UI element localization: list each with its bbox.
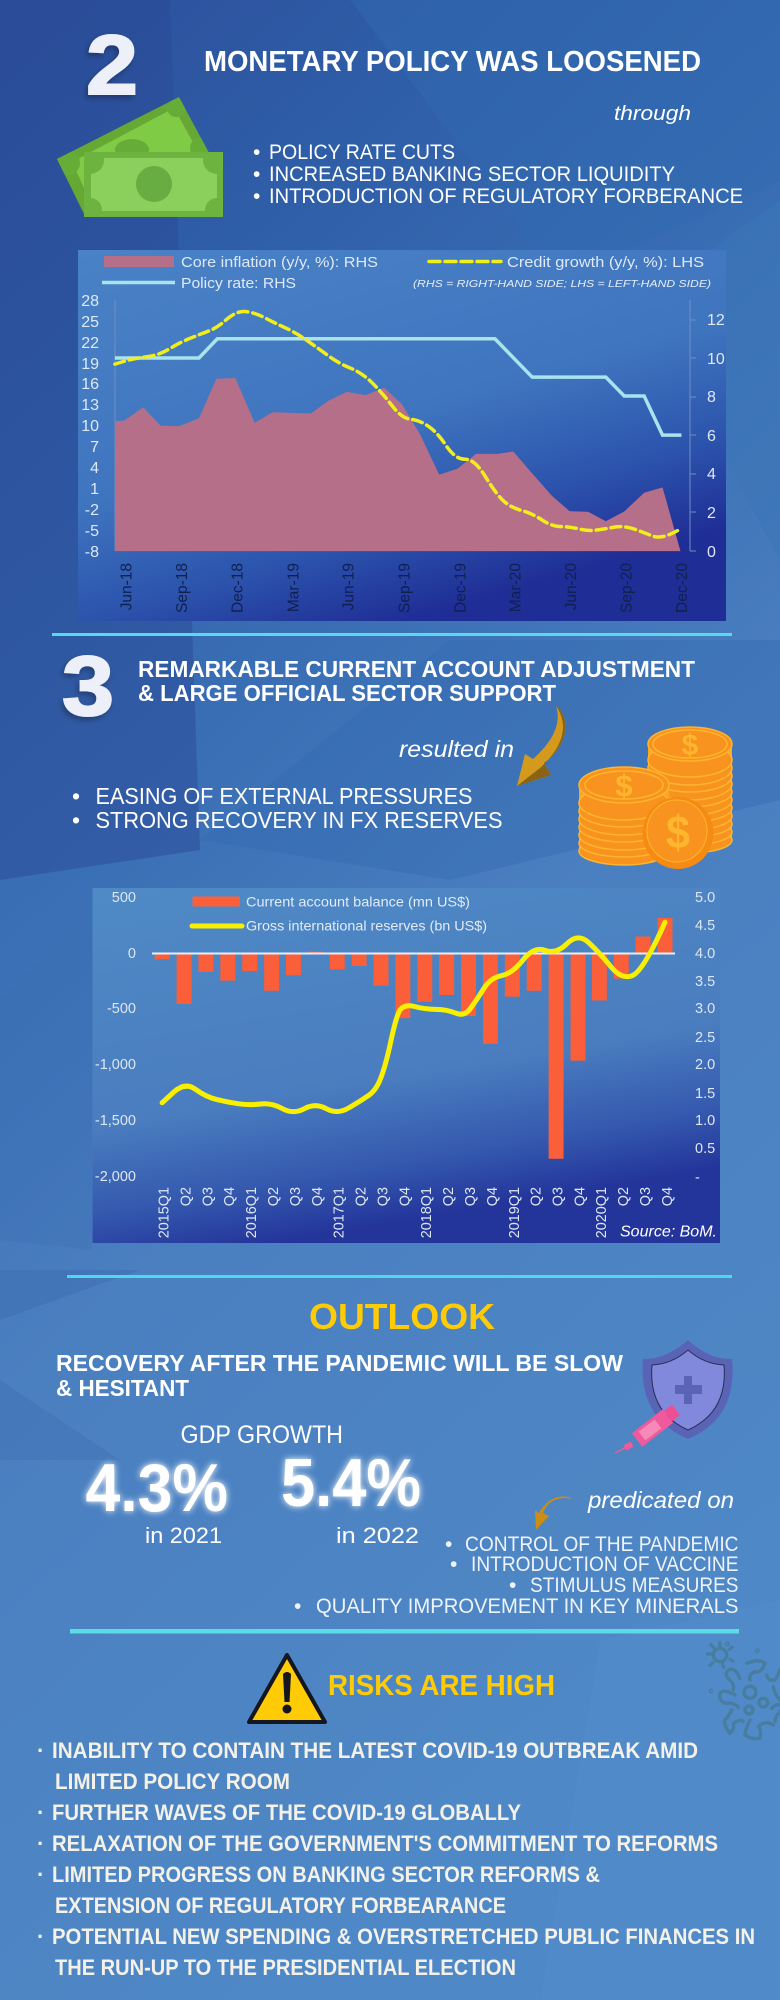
outlook bullet list: INTRODUCTION OF VACCINE — [471, 1553, 738, 1576]
chart 1 legend — [102, 254, 711, 292]
chart 1 right axis: 4 — [707, 466, 716, 483]
chart 2 right axis: 1.0 — [695, 1113, 715, 1129]
chart 1 time axis labels: Dec-20 — [674, 563, 691, 613]
outlook bullet list: • — [450, 1553, 457, 1576]
chart 1 right axis: 2 — [707, 505, 716, 522]
chart 2 quarter labels: Q3 — [463, 1187, 479, 1206]
chart 1 time axis labels — [118, 563, 691, 613]
panel: current account and reserves chart — [92, 888, 720, 1243]
chart 2 quarter labels: Q2 — [528, 1187, 544, 1206]
outlook subheading: & HESITANT — [56, 1375, 190, 1401]
chart 1 left axis: -8 — [85, 544, 99, 561]
chart 1 time axis labels: Jun-20 — [563, 563, 580, 610]
chart 2 quarter labels — [156, 1187, 676, 1238]
divider — [52, 633, 732, 636]
outlook bullet list: CONTROL OF THE PANDEMIC — [465, 1533, 738, 1556]
chart 1 time axis labels: Sep-20 — [618, 563, 636, 613]
chart 1 left axis: 1 — [90, 481, 99, 498]
chart 1 left axis: 22 — [81, 335, 99, 352]
chart 1 right axis: 0 — [707, 544, 716, 561]
chart 2 quarter labels: Q2 — [266, 1187, 282, 1206]
section 2 number: 2 — [86, 18, 138, 112]
current account bars — [155, 918, 672, 1159]
section 3 heading: REMARKABLE CURRENT ACCOUNT ADJUSTMENT — [138, 656, 695, 682]
outlook heading: OUTLOOK — [309, 1296, 495, 1337]
section 3 bullet list: • — [72, 807, 80, 833]
section 2 bullet list: INCREASED BANKING SECTOR LIQUIDITY — [269, 163, 675, 186]
chart 1 time axis labels: Mar-20 — [508, 563, 524, 612]
chart 2 left axis: -1,500 — [95, 1113, 136, 1129]
label: predicated on: predicated on — [587, 1487, 734, 1513]
risks bullet list: · — [37, 1862, 44, 1887]
chart 1 left axis: -5 — [85, 523, 99, 540]
back coin dollar sign: $ — [682, 729, 699, 762]
outlook bullet list: QUALITY IMPROVEMENT IN KEY MINERALS — [316, 1595, 738, 1618]
front coin — [642, 797, 714, 869]
chart 2 quarter labels: Q4 — [660, 1187, 676, 1206]
chart 2 quarter labels: Q4 — [222, 1187, 238, 1206]
icon: shield and syringe — [615, 1340, 733, 1453]
arrow: small gold — [535, 1496, 573, 1530]
risks bullet list: INABILITY TO CONTAIN THE LATEST COVID-19 OUTBREAK AMID — [52, 1738, 698, 1763]
chart 1 time axis labels: Jun-19 — [340, 563, 358, 610]
arrow: curved gold — [517, 706, 565, 786]
left coin stack — [579, 767, 669, 865]
chart 1 left axis — [81, 293, 115, 561]
risks bullet list: LIMITED PROGRESS ON BANKING SECTOR REFORMS & — [52, 1862, 600, 1887]
risks bullet list: RELAXATION OF THE GOVERNMENT'S COMMITMENT TO REFORMS — [52, 1831, 718, 1856]
chart 1 legend: (RHS = RIGHT-HAND SIDE; LHS = LEFT-HAND SIDE) — [413, 278, 711, 290]
chart 2 quarter labels: 2020Q1 — [594, 1187, 610, 1238]
outlook bullet list: • — [294, 1595, 301, 1618]
chart 2 quarter labels: 2019Q1 — [507, 1187, 523, 1238]
chart 2 right axis: 0.5 — [695, 1141, 715, 1157]
section 3 bullet list — [72, 783, 502, 833]
core inflation area — [115, 378, 680, 551]
chart 2 quarter labels: Q4 — [485, 1187, 501, 1206]
chart 2 quarter labels: Q2 — [354, 1187, 370, 1206]
chart 2 quarter labels: 2018Q1 — [419, 1187, 435, 1238]
label: through: through — [614, 103, 691, 125]
chart 2 right axis: 5.0 — [695, 890, 715, 906]
section 2 bullet list: INTRODUCTION OF REGULATORY FORBERANCE — [269, 185, 743, 208]
outlook bullet list: • — [445, 1533, 452, 1556]
risks bullet list: · — [37, 1924, 44, 1949]
section 2 bullet list: • — [253, 163, 260, 186]
chart 2 quarter labels: 2016Q1 — [244, 1187, 260, 1238]
outlook subheading: RECOVERY AFTER THE PANDEMIC WILL BE SLOW — [56, 1350, 624, 1376]
chart 2 left axis: -500 — [107, 1001, 136, 1017]
chart 2 left axis: 0 — [128, 946, 136, 962]
chart 2 right axis — [695, 890, 715, 1186]
section 2 bullet list: • — [253, 141, 260, 164]
chart 1 left axis: 25 — [81, 314, 99, 331]
chart 1 left axis: 13 — [81, 397, 99, 414]
chart 2 right axis: 4.5 — [695, 918, 715, 934]
chart 2 quarter labels: Q3 — [288, 1187, 304, 1206]
chart 2 right axis: - — [695, 1170, 700, 1186]
label: resulted in: resulted in — [399, 736, 514, 762]
divider — [70, 1629, 739, 1634]
chart 2 right axis: 3.5 — [695, 974, 715, 990]
chart 1 right axis: 8 — [707, 389, 716, 406]
chart 1 legend: Credit growth (y/y, %): LHS — [507, 254, 704, 271]
front coin dollar sign: $ — [666, 806, 690, 858]
label: GDP growth: GDP GROWTH — [180, 1421, 343, 1449]
divider — [67, 1275, 732, 1278]
outlook bullet list: • — [509, 1574, 516, 1597]
stat: 2022 growth — [281, 1445, 421, 1548]
chart 2 legend: Gross international reserves (bn US$) — [246, 918, 487, 934]
chart 1 right axis: 10 — [707, 351, 725, 368]
section 3 bullet list: STRONG RECOVERY IN FX RESERVES — [96, 807, 502, 833]
icon: warning triangle — [249, 1655, 325, 1722]
risks bullet list: LIMITED POLICY ROOM — [55, 1769, 290, 1794]
stat: 2022 growth: 5.4% — [281, 1445, 421, 1521]
chart 1 legend: Policy rate: RHS — [181, 275, 296, 292]
risks heading: RISKS ARE HIGH — [328, 1670, 555, 1702]
chart 1 left axis: -2 — [85, 502, 99, 519]
risks bullet list: · — [37, 1738, 44, 1763]
chart 1 time axis labels: Mar-19 — [286, 563, 302, 612]
chart 2 quarter labels: 2015Q1 — [156, 1187, 172, 1238]
chart 1 left axis: 28 — [81, 293, 99, 310]
section 2 bullet list: POLICY RATE CUTS — [269, 141, 455, 164]
chart 2 quarter labels: Q4 — [572, 1187, 588, 1206]
chart 2 right axis: 4.0 — [695, 946, 715, 962]
back coin stack — [648, 727, 732, 853]
chart 2 quarter labels: Q2 — [616, 1187, 632, 1206]
chart 2 quarter labels: Q2 — [441, 1187, 457, 1206]
chart 2 right axis: 1.5 — [695, 1086, 715, 1102]
chart 1 left axis: 7 — [90, 439, 99, 456]
chart 1 right axis: 6 — [707, 428, 716, 445]
chart 1 right axis — [690, 300, 725, 561]
credit growth dashed line — [115, 311, 677, 537]
outlook subheading — [56, 1350, 624, 1401]
chart 1 time axis labels: Dec-19 — [452, 563, 470, 613]
chart 2 left axis: -1,000 — [95, 1057, 136, 1073]
chart 2 left axis: -2,000 — [95, 1169, 136, 1185]
chart 2 legend: Current account balance (mn US$) — [246, 894, 470, 910]
chart 2 quarter labels: Q4 — [310, 1187, 326, 1206]
risks bullet list: · — [37, 1831, 44, 1856]
risks bullet list: EXTENSION OF REGULATORY FORBEARANCE — [55, 1893, 506, 1918]
section 3 bullet list: EASING OF EXTERNAL PRESSURES — [96, 783, 472, 809]
chart 2 right axis: 3.0 — [695, 1001, 715, 1017]
chart 2 quarter labels: Q3 — [376, 1187, 392, 1206]
section 3 heading — [138, 656, 695, 706]
risks bullet list — [37, 1738, 755, 1980]
chart 1 time axis labels: Jun-18 — [118, 563, 136, 610]
chart 1 left axis: 19 — [81, 356, 99, 373]
chart 2 right axis: 2.0 — [695, 1057, 715, 1073]
section 3 number: 3 — [62, 639, 114, 733]
chart 2 quarter labels: Q2 — [178, 1187, 194, 1206]
risks bullet list: · — [37, 1800, 44, 1825]
section 3 heading: & LARGE OFFICIAL SECTOR SUPPORT — [138, 680, 556, 706]
outlook bullet list: STIMULUS MEASURES — [530, 1574, 738, 1597]
chart 2 quarter labels: Q3 — [200, 1187, 216, 1206]
reserves line — [162, 922, 665, 1112]
icon: gold coins — [579, 727, 732, 869]
chart 1 time axis labels: Sep-19 — [396, 563, 414, 613]
section 2 heading: MONETARY POLICY WAS LOOSENED — [204, 46, 701, 78]
panel: inflation, credit growth and policy rate chart — [78, 250, 726, 621]
outlook bullet list — [294, 1533, 738, 1618]
risks bullet list: FURTHER WAVES OF THE COVID-19 GLOBALLY — [52, 1800, 521, 1825]
chart 2 legend — [192, 894, 487, 934]
chart 1 legend: Core inflation (y/y, %): RHS — [181, 254, 378, 271]
chart 1 time axis labels: Dec-18 — [230, 563, 246, 613]
policy rate line — [115, 339, 681, 435]
risks bullet list: THE RUN-UP TO THE PRESIDENTIAL ELECTION — [55, 1955, 516, 1980]
chart 2 right axis: 2.5 — [695, 1030, 715, 1046]
chart 2 left axis: 500 — [112, 890, 136, 906]
chart 1 time axis labels: Sep-18 — [174, 563, 191, 613]
chart 2 quarter labels: 2017Q1 — [332, 1187, 348, 1238]
chart 2 quarter labels: Q3 — [638, 1187, 654, 1206]
section 2 bullet list: • — [253, 185, 260, 208]
chart 2 quarter labels: Q3 — [550, 1187, 566, 1206]
chart 1 left axis: 16 — [81, 376, 99, 393]
stat: 2021 growth: 4.3% — [86, 1450, 228, 1526]
stat: 2021 growth: in 2021 — [145, 1523, 222, 1548]
source note: Source: BoM. — [620, 1224, 717, 1240]
chart 1 left axis: 10 — [81, 418, 99, 435]
icon: virus — [707, 1643, 780, 1739]
chart 1 right axis: 12 — [707, 312, 725, 329]
chart 2 quarter labels: Q4 — [398, 1187, 414, 1206]
left coin dollar sign: $ — [615, 768, 633, 803]
section 3 bullet list: • — [72, 783, 80, 809]
zero line — [152, 952, 675, 954]
section 2 bullet list — [253, 141, 743, 208]
chart 1 left axis: 4 — [90, 460, 99, 477]
chart 2 left axis — [95, 890, 136, 1185]
icon: banknotes — [56, 97, 231, 222]
stat: 2022 growth: in 2022 — [336, 1523, 419, 1548]
